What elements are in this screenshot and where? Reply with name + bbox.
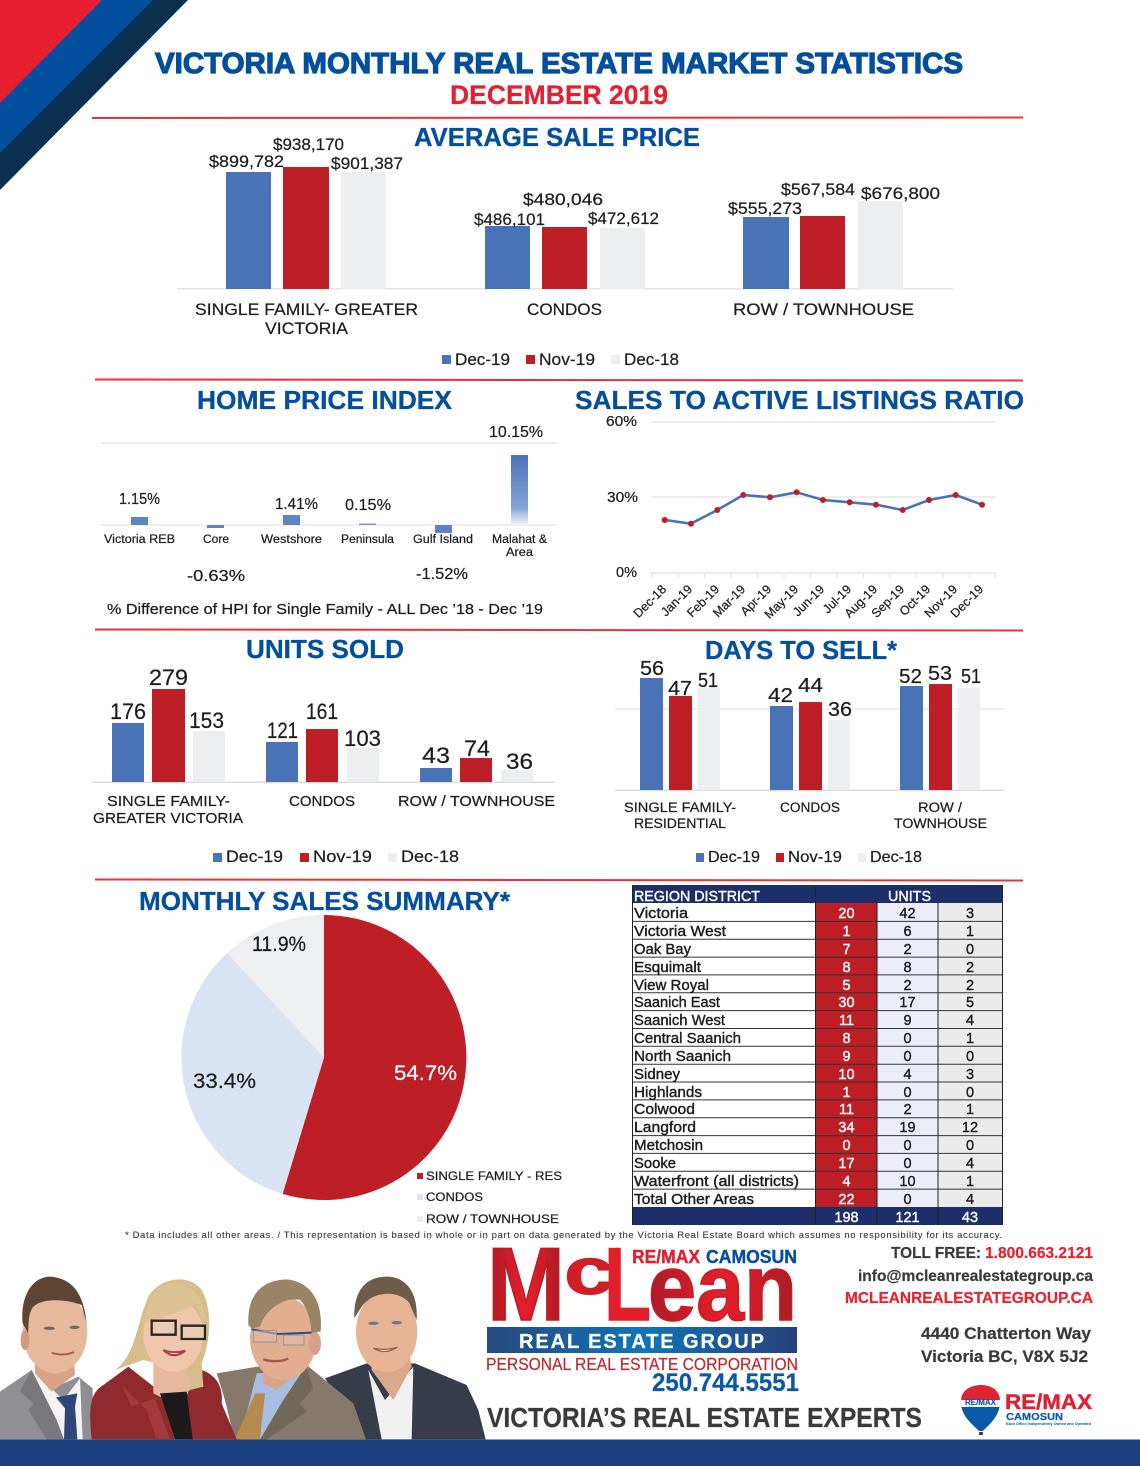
heading: average sale price: AVERAGE SALE PRICE — [414, 122, 700, 152]
table: region district units: 2 — [903, 978, 912, 994]
table: region district units: Esquimalt — [634, 960, 701, 976]
table: region district units: Victoria West — [634, 924, 726, 940]
bar chart: average sale price — [177, 135, 953, 338]
bar chart: days to sell: SINGLE FAMILY- — [624, 800, 736, 815]
table: region district units: 0 — [903, 1031, 912, 1047]
bar chart: home price index: 1.41% — [275, 496, 318, 513]
legend: average sale price: Dec-19 — [455, 350, 510, 369]
bar chart: days to sell: 36 — [828, 699, 852, 721]
table: region district units: 2 — [966, 978, 974, 994]
table: region district units: 2 — [903, 1102, 912, 1118]
table: region district units: Waterfront (all districts) — [634, 1174, 799, 1190]
table: region district units: 2 — [966, 960, 974, 976]
bar chart: average sale price: $486,101 — [474, 210, 545, 229]
table: region district units: Central Saanich — [634, 1031, 741, 1047]
person 1 — [0, 1277, 93, 1439]
bar chart: days to sell: CONDOS — [780, 800, 840, 815]
bar chart: average sale price: $480,046 — [523, 190, 603, 209]
bar chart: home price index: Westshore — [261, 534, 322, 546]
heading: sales to active listings ratio: SALES TO ACTIVE LISTINGS RATIO — [575, 385, 1024, 415]
subtitle: month: DECEMBER 2019 — [450, 80, 668, 110]
legend: pie chart: SINGLE FAMILY - RES — [426, 1169, 562, 1183]
logo: c: c — [564, 1234, 614, 1308]
table: region district units: 121 — [895, 1210, 920, 1226]
bar chart: days to sell: 44 — [798, 675, 823, 697]
line chart: sales to active listings ratio: Oct-19 — [897, 582, 933, 619]
table: region district units: Saanich West — [634, 1013, 725, 1029]
table: region district units: 20 — [838, 906, 855, 922]
bar chart: home price index: Core — [203, 534, 229, 546]
bar chart: home price index: Malahat & — [492, 534, 547, 546]
logo: RE/MAX Camosun line: RE/MAX — [632, 1247, 700, 1267]
line chart: sales to active listings ratio: Jan-19 — [658, 582, 695, 619]
bar chart: units sold — [91, 665, 555, 827]
table: region district units: 10 — [899, 1174, 916, 1190]
table: region district units: 1 — [966, 924, 974, 940]
line chart: sales to active listings ratio: 0% — [616, 565, 637, 581]
logo: real estate group banner — [487, 1327, 797, 1353]
table: region district units: 198 — [834, 1210, 859, 1226]
bar chart: average sale price: $676,800 — [861, 184, 940, 203]
table: region district units: 12 — [962, 1120, 978, 1136]
table: region district units: 1 — [842, 1085, 851, 1101]
icon: RE/MAX balloon: RE/MAX — [965, 1398, 997, 1407]
legend: days to sell: Dec-18 — [870, 849, 922, 866]
bar chart: average sale price: $555,273 — [728, 199, 802, 218]
bar chart: units sold: ROW / TOWNHOUSE — [398, 793, 555, 810]
phone number: 250.744.5551 — [652, 1369, 799, 1397]
bottom band — [0, 1440, 1140, 1466]
table: region district units: 3 — [966, 1067, 974, 1083]
bar chart: average sale price: $899,782 — [209, 152, 284, 171]
line chart: sales to active listings ratio: Jul-19 — [820, 582, 854, 616]
table: region district units: Saanich East — [634, 995, 720, 1011]
logo: L: L — [604, 1227, 651, 1343]
bar chart: average sale price: $938,170 — [273, 135, 344, 154]
heading: units sold: UNITS SOLD — [246, 634, 404, 664]
bar chart: home price index: Area — [506, 547, 534, 559]
table: region district units: 5 — [842, 978, 851, 994]
bar chart: units sold: CONDOS — [289, 793, 355, 810]
bar chart: units sold: 176 — [110, 699, 146, 724]
table: region district units: 9 — [842, 1049, 851, 1065]
table: region district units: 5 — [966, 995, 974, 1011]
bar chart: units sold: SINGLE FAMILY- — [107, 793, 230, 810]
line chart: sales to active listings ratio: 60% — [606, 414, 637, 430]
table: region district units: 4 — [966, 1192, 974, 1208]
table: region district units: 7 — [842, 942, 851, 958]
icon: RE/MAX balloon — [961, 1385, 1000, 1435]
line chart: sales to active listings ratio: 30% — [607, 490, 638, 506]
legend: units sold: Dec-19 — [226, 847, 283, 866]
contact details — [845, 1245, 1093, 1307]
table: region district units: 8 — [842, 1031, 851, 1047]
bar chart: days to sell: 42 — [768, 685, 793, 707]
bar chart: days to sell: 52 — [899, 666, 922, 688]
table: region district units — [632, 885, 1003, 1226]
legend: pie chart: CONDOS — [426, 1190, 483, 1204]
table: region district units: 0 — [903, 1138, 912, 1154]
bar chart: units sold: 103 — [344, 726, 381, 751]
bar chart: home price index: 10.15% — [489, 424, 543, 441]
bar chart: days to sell — [615, 658, 1005, 831]
bar chart: average sale price: ROW / TOWNHOUSE — [733, 300, 914, 319]
bar chart: home price index: Victoria REB — [104, 534, 175, 546]
logo: RE/MAX Camosun: Each Office Independently Owned and Operated — [1006, 1421, 1092, 1426]
logo: personal real estate corporation: PERSONAL REAL ESTATE CORPORATION — [486, 1354, 798, 1374]
bar chart: days to sell: ROW / — [918, 800, 962, 815]
chart caption: HPI: % Difference of HPI for Single Family - ALL Dec ’18 - Dec ’19 — [107, 602, 543, 618]
table: region district units: 17 — [838, 1156, 855, 1172]
bar chart: days to sell: 47 — [668, 678, 692, 700]
table: region district units: Total Other Areas — [634, 1192, 754, 1208]
line chart: sales to active listings ratio: Nov-19 — [922, 582, 960, 621]
corner stripes — [0, 0, 188, 190]
logo: RE/MAX Camosun: CAMOSUN — [1006, 1411, 1063, 1423]
table: region district units: 19 — [899, 1120, 916, 1136]
bar chart: days to sell: 51 — [961, 666, 981, 688]
person 3 — [217, 1279, 366, 1439]
bar chart: days to sell: 51 — [698, 670, 718, 692]
heading: home price index: HOME PRICE INDEX — [197, 385, 453, 415]
table: region district units: 8 — [903, 960, 912, 976]
bar chart: home price index: 0.15% — [345, 497, 391, 514]
bar chart: home price index: -0.63% — [187, 568, 245, 585]
table: region district units: UNITS — [888, 889, 931, 905]
heading: days to sell: DAYS TO SELL* — [705, 635, 898, 665]
table: region district units: REGION DISTRICT — [634, 889, 760, 905]
table: region district units: Metchosin — [634, 1138, 703, 1154]
line chart: sales to active listings ratio: Feb-19 — [684, 582, 722, 620]
bar chart: units sold: 121 — [267, 718, 298, 743]
logo: RE/MAX Camosun line — [632, 1247, 797, 1267]
table: region district units: 1 — [842, 924, 851, 940]
line chart: sales to active listings ratio — [606, 414, 995, 622]
legend: units sold: Nov-19 — [313, 847, 372, 866]
line chart: sales to active listings ratio: Aug-19 — [842, 582, 880, 621]
table: region district units: Oak Bay — [634, 942, 692, 958]
table: region district units: 1 — [966, 1174, 974, 1190]
bar chart: days to sell: RESIDENTIAL — [634, 816, 727, 831]
legend: average sale price — [442, 350, 679, 369]
logo: real estate group banner: REAL ESTATE GROUP — [519, 1331, 764, 1353]
table: region district units: 0 — [966, 1085, 974, 1101]
line chart: sales to active listings ratio: Dec-18 — [631, 582, 669, 621]
table: region district units: Sidney — [634, 1067, 681, 1083]
table: region district units: 11 — [839, 1102, 854, 1118]
legend: units sold — [213, 847, 459, 866]
table: region district units: Sooke — [634, 1156, 676, 1172]
line chart: sales to active listings ratio: Sep-19 — [869, 582, 907, 621]
table: region district units: 4 — [903, 1067, 912, 1083]
address — [921, 1324, 1092, 1366]
table: region district units: 0 — [903, 1192, 912, 1208]
legend: pie chart: ROW / TOWNHOUSE — [426, 1212, 559, 1226]
heading: monthly sales summary: MONTHLY SALES SUMMARY* — [139, 886, 511, 916]
table: region district units: View Royal — [634, 978, 709, 994]
table: region district units: Langford — [634, 1120, 696, 1136]
pie chart: monthly sales: 11.9% — [252, 933, 306, 956]
logo: ean: ean — [648, 1235, 797, 1341]
bar chart: home price index: 1.15% — [119, 491, 160, 508]
bar chart: home price index: Peninsula — [341, 534, 395, 546]
bar chart: home price index: -1.52% — [416, 566, 468, 583]
logo: M: M — [487, 1227, 565, 1343]
table: region district units: 0 — [966, 1138, 974, 1154]
table: region district units: 4 — [842, 1174, 851, 1190]
table: region district units: 43 — [962, 1210, 978, 1226]
logo: RE/MAX Camosun line: CAMOSUN — [706, 1247, 797, 1267]
table: region district units: 17 — [899, 995, 916, 1011]
contact details: TOLL FREE: — [891, 1245, 981, 1262]
table: region district units: North Saanich — [634, 1049, 731, 1065]
table: region district units: 0 — [966, 942, 974, 958]
legend: days to sell — [696, 849, 922, 866]
address: 4440 Chatterton Way — [921, 1324, 1092, 1343]
bar chart: average sale price: $472,612 — [588, 209, 659, 228]
person 2 — [90, 1279, 237, 1439]
table: region district units: 1 — [966, 1102, 974, 1118]
table: region district units: 0 — [903, 1156, 912, 1172]
table: region district units: 8 — [842, 960, 851, 976]
logo: McLean — [487, 1227, 797, 1343]
table: region district units: Victoria — [634, 906, 689, 922]
table: region district units: 42 — [899, 906, 916, 922]
table: region district units: 4 — [966, 1156, 974, 1172]
table: region district units: 0 — [966, 1049, 974, 1065]
bar chart: units sold: GREATER VICTORIA — [93, 810, 243, 827]
table: region district units: 3 — [966, 906, 974, 922]
table: region district units: 30 — [838, 995, 855, 1011]
bar chart: units sold: 153 — [189, 708, 224, 733]
bar chart: home price index: Gulf Island — [413, 534, 473, 546]
legend: units sold: Dec-18 — [401, 847, 459, 866]
contact details: MCLEANREALESTATEGROUP.CA — [845, 1290, 1093, 1307]
logo: RE/MAX Camosun — [1005, 1391, 1092, 1426]
legend: days to sell: Nov-19 — [788, 849, 842, 866]
legend: pie chart — [417, 1169, 562, 1226]
address: Victoria BC, V8X 5J2 — [921, 1347, 1088, 1366]
pie chart: monthly sales: 33.4% — [193, 1070, 256, 1093]
tagline: VICTORIA’S REAL ESTATE EXPERTS — [487, 1402, 922, 1433]
bar chart: average sale price: $567,584 — [781, 180, 855, 199]
bar chart: units sold: 36 — [506, 749, 533, 774]
bar chart: days to sell: TOWNHOUSE — [894, 816, 987, 831]
legend: days to sell: Dec-19 — [708, 849, 760, 866]
table: region district units: 9 — [903, 1013, 912, 1029]
team photo — [0, 1277, 486, 1439]
line chart: sales to active listings ratio: Apr-19 — [738, 582, 774, 619]
table: region district units: 1 — [966, 1031, 974, 1047]
line chart: sales to active listings ratio: Dec-19 — [948, 582, 986, 621]
legend: average sale price: Dec-18 — [624, 350, 679, 369]
bar chart: units sold: 161 — [306, 699, 338, 724]
bar chart: units sold: 74 — [464, 736, 490, 761]
bar chart: home price index — [101, 424, 557, 585]
bar chart: average sale price: VICTORIA — [265, 319, 349, 338]
line chart: sales to active listings ratio: Jun-19 — [790, 582, 827, 619]
person 4 — [325, 1277, 486, 1439]
footnote: * Data includes all other areas. / This representation is based in whole or in part on data generated by the Victoria Real Estate Board which assumes no responsibility for its accuracy. — [125, 1230, 1002, 1241]
bar chart: units sold: 279 — [149, 665, 188, 690]
title: VICTORIA MONTHLY REAL ESTATE MARKET STATISTICS — [155, 48, 963, 80]
table: region district units: 6 — [903, 924, 912, 940]
table: region district units: Highlands — [634, 1085, 702, 1101]
bar chart: units sold: 43 — [422, 743, 450, 768]
line chart: sales to active listings ratio: May-19 — [762, 582, 801, 622]
table: region district units: 0 — [903, 1085, 912, 1101]
pie chart: monthly sales: 54.7% — [394, 1062, 457, 1085]
table: region district units: 4 — [966, 1013, 974, 1029]
contact details: info@mcleanrealestategroup.ca — [858, 1268, 1093, 1285]
legend: average sale price: Nov-19 — [539, 350, 595, 369]
table: region district units: 22 — [838, 1192, 855, 1208]
table: region district units: 2 — [903, 942, 912, 958]
bar chart: average sale price: $901,387 — [331, 154, 403, 173]
line chart: sales to active listings ratio: Mar-19 — [710, 582, 748, 620]
table: region district units: 34 — [838, 1120, 855, 1136]
contact details: 1.800.663.2121 — [985, 1245, 1093, 1262]
bar chart: average sale price: SINGLE FAMILY- GREATER — [195, 300, 418, 319]
table: region district units: 11 — [839, 1013, 854, 1029]
bar chart: days to sell: 53 — [928, 663, 952, 685]
pie chart: monthly sales — [181, 915, 466, 1200]
bar chart: average sale price: CONDOS — [527, 300, 602, 319]
bar chart: days to sell: 56 — [640, 658, 664, 680]
table: region district units: 10 — [838, 1067, 855, 1083]
logo: RE/MAX Camosun: RE/MAX — [1005, 1391, 1092, 1414]
table: region district units: Colwood — [634, 1102, 695, 1118]
table: region district units: 0 — [842, 1138, 851, 1154]
table: region district units: 0 — [903, 1049, 912, 1065]
